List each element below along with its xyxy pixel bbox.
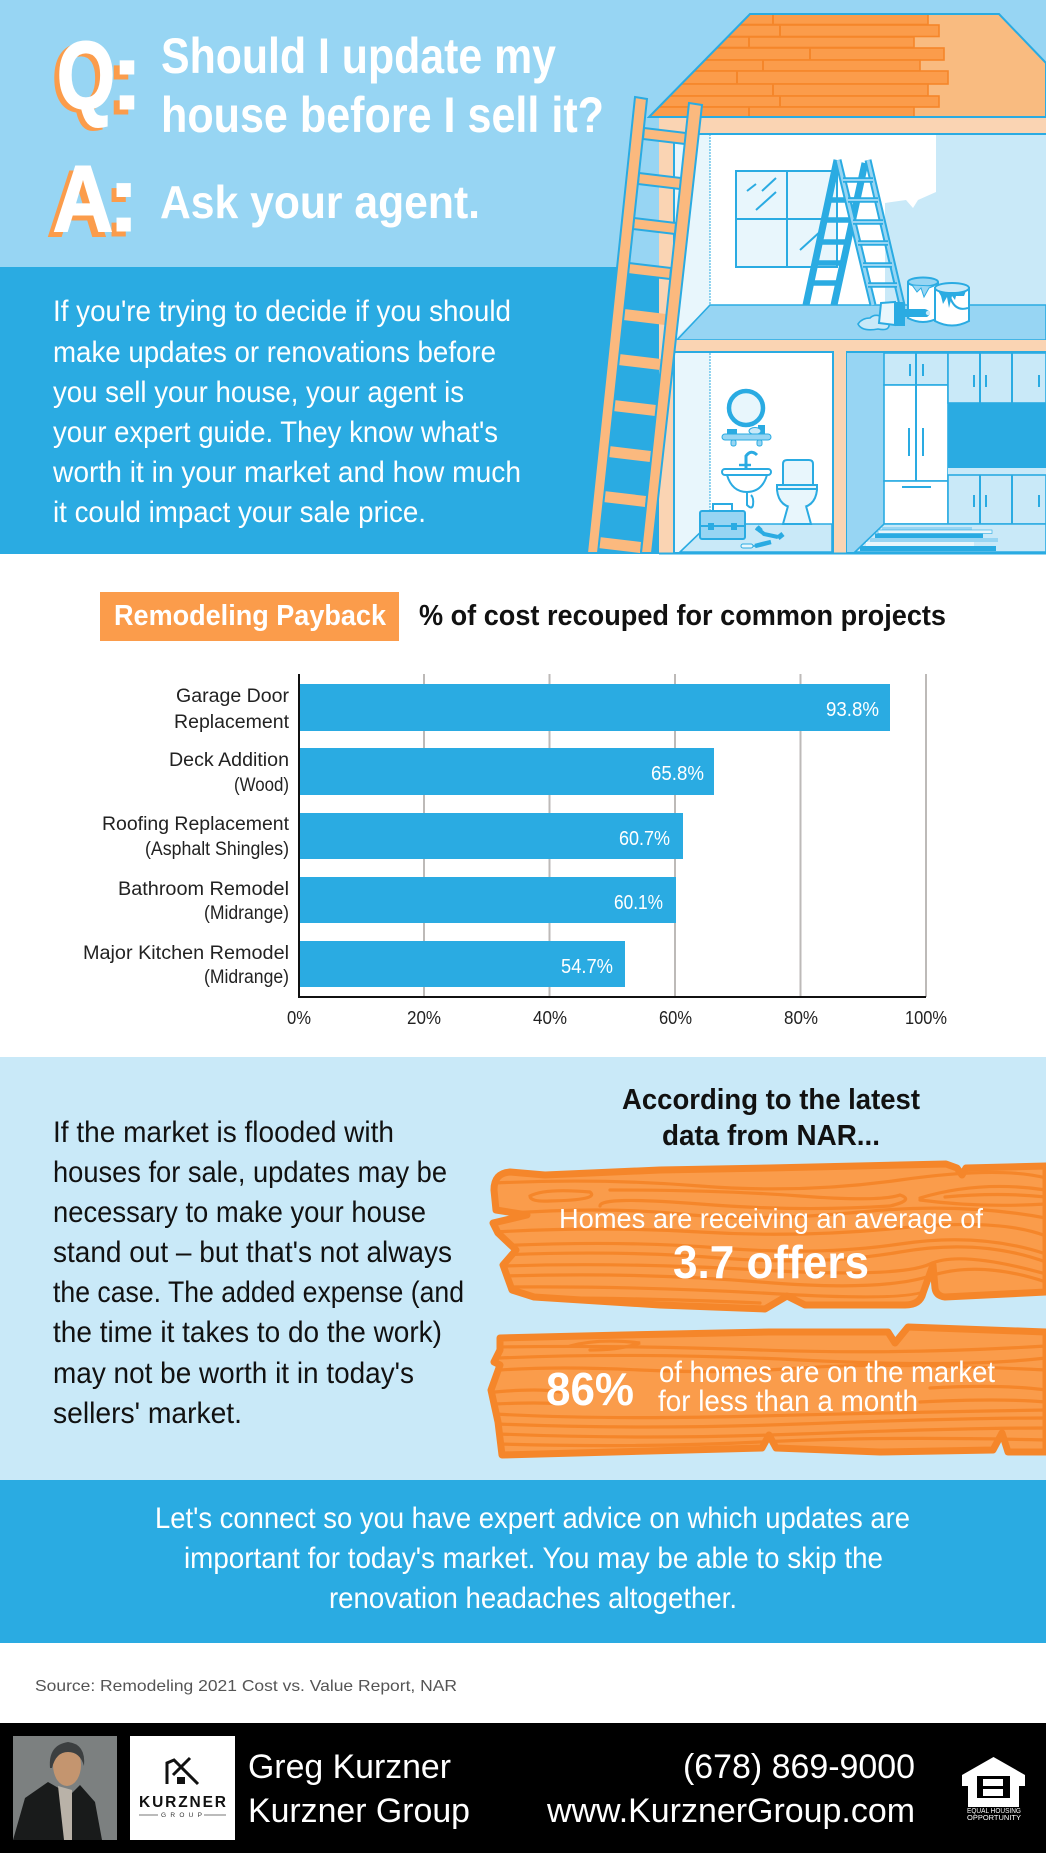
bar: roofing replacement: (Asphalt Shingles)	[145, 839, 289, 860]
text block: intro paragraph: worth it in your market and how much	[52, 456, 521, 489]
cabinets upper over fridge	[884, 353, 948, 385]
big letter Q: :	[111, 23, 143, 130]
text block: market paragraph: stand out – but that's not always	[53, 1236, 452, 1269]
panel: market data background	[0, 1057, 1046, 1480]
heading: NAR data	[622, 1084, 920, 1152]
backsplash	[948, 403, 1046, 468]
bar: deck addition: (Wood)	[234, 775, 289, 796]
peach outer wall	[659, 134, 674, 553]
panel: call to action	[0, 1480, 1046, 1643]
call to action text: important for today's market. You may be able to skip the	[184, 1542, 883, 1575]
call to action text: Let's connect so you have expert advice on which updates are	[155, 1502, 910, 1535]
agent name: Kurzner Group	[248, 1792, 470, 1830]
question text: Should I update my	[161, 28, 556, 84]
text block: market paragraph: sellers' market.	[53, 1397, 242, 1430]
big letter A: :	[103, 151, 134, 256]
source note: Source: Remodeling 2021 Cost vs. Value Report, NAR	[35, 1678, 457, 1695]
orange tag	[100, 592, 399, 641]
bar: major kitchen remodel: 54.7%	[561, 956, 613, 978]
title: answer	[47, 146, 480, 256]
bar: major kitchen remodel: (Midrange)	[204, 967, 289, 988]
text block: market paragraph: houses for sale, updates may be	[53, 1156, 447, 1189]
fridge	[884, 385, 948, 524]
bar: bathroom remodel	[118, 877, 676, 924]
bar: bathroom remodel: (Midrange)	[204, 903, 289, 924]
footer bar	[0, 1723, 1046, 1853]
grid lines and axes	[298, 674, 926, 998]
bar: deck addition	[169, 748, 714, 796]
axis labels: 60%	[659, 1008, 692, 1028]
logo: Kurzner Group	[130, 1736, 235, 1840]
big letter A: :	[108, 146, 139, 251]
heading: NAR data: data from NAR...	[662, 1120, 880, 1152]
base cabinets	[948, 468, 1046, 524]
icon: mirror	[729, 391, 763, 425]
base line	[659, 552, 1046, 554]
icon: equal housing opportunity: OPPORTUNITY	[967, 1815, 1021, 1822]
plank text	[658, 1356, 996, 1418]
roof	[640, 14, 1046, 118]
panel: sky header background	[0, 0, 1046, 267]
contact details: (678) 869-9000	[683, 1748, 915, 1786]
paint cans	[908, 278, 969, 326]
icon: wrench and screwdriver	[741, 527, 783, 548]
photo: agent portrait	[13, 1736, 117, 1840]
wood grain	[495, 1172, 1046, 1303]
text block: market paragraph: the case. The added expense (and	[53, 1276, 464, 1309]
icon: toolbox	[700, 504, 745, 539]
icon: shelf	[722, 425, 771, 446]
text block: market paragraph: the time it takes to do the work)	[53, 1316, 442, 1349]
text block: intro paragraph	[52, 295, 521, 529]
bar: garage door: Garage Door	[176, 686, 290, 707]
eave	[659, 118, 1046, 134]
contact details	[546, 1748, 915, 1830]
axis labels: 20%	[407, 1008, 441, 1028]
big number: 86%: 86%	[546, 1363, 634, 1415]
bar: bathroom remodel: Bathroom Remodel	[118, 879, 289, 900]
agent name: Greg Kurzner	[248, 1748, 451, 1786]
axis labels: 0%	[287, 1008, 311, 1028]
call to action text	[155, 1502, 910, 1615]
axis labels	[287, 1008, 947, 1028]
text block: market paragraph: necessary to make your house	[53, 1196, 426, 1229]
bar chart: remodeling payback	[83, 674, 947, 1028]
text block: intro paragraph: If you're trying to decide if you should	[53, 295, 511, 328]
big letter A: A	[47, 151, 107, 256]
question text: house before I sell it?	[161, 87, 604, 143]
window	[736, 171, 837, 267]
heading: remodeling payback	[100, 592, 946, 641]
illustration: orange extension ladder	[587, 97, 702, 553]
bar: deck addition: 65.8%	[651, 763, 704, 785]
icon: equal housing opportunity	[962, 1757, 1025, 1822]
orange tag: Remodeling Payback	[114, 600, 387, 632]
callout: wood plank days on market	[491, 1327, 1046, 1455]
bar: garage door: 93.8%	[826, 699, 879, 721]
callout: wood plank offers	[493, 1164, 1046, 1309]
text block: market paragraph	[53, 1116, 464, 1430]
logo: Kurzner Group: GROUP	[161, 1812, 202, 1819]
icon: equal housing opportunity: EQUAL HOUSING	[967, 1808, 1021, 1815]
big letter Q: :	[105, 28, 137, 135]
paint brush and puddle	[858, 302, 930, 330]
bar: roofing replacement	[102, 813, 683, 860]
bathroom	[674, 352, 833, 553]
big letter Q: Q	[52, 25, 110, 132]
logo: Kurzner Group: KURZNER	[139, 1794, 226, 1811]
bar: deck addition: Deck Addition	[169, 750, 289, 771]
axis labels: 80%	[784, 1008, 818, 1028]
icon: toilet	[777, 460, 817, 524]
contact details: www.KurznerGroup.com	[546, 1792, 915, 1830]
big number: offers: 3.7 offers	[673, 1236, 869, 1288]
text block: intro paragraph: make updates or renovations before	[53, 336, 496, 369]
floor upper	[677, 305, 1046, 340]
kitchen	[847, 352, 1046, 553]
text block: intro paragraph: your expert guide. They know what's	[53, 416, 498, 449]
bar: garage door: Replacement	[174, 712, 290, 733]
floor planks	[855, 524, 1046, 552]
upper room	[659, 134, 1046, 340]
agent name	[248, 1748, 470, 1830]
illustration: house cross-section	[640, 14, 1046, 554]
bar: garage door	[174, 684, 890, 733]
text block: intro paragraph: you sell your house, your agent is	[53, 376, 464, 409]
stepladder	[806, 160, 902, 305]
peach pillar	[834, 352, 847, 553]
axis labels: 40%	[533, 1008, 567, 1028]
chart subtitle: % of cost recouped for common projects	[419, 600, 946, 632]
icon: sink	[722, 452, 771, 508]
bar: roofing replacement: Roofing Replacement	[102, 814, 290, 835]
plank text: Homes are receiving an average of	[559, 1203, 983, 1234]
big letter A: A	[53, 146, 113, 251]
title: question	[52, 22, 604, 143]
panel: intro blue background	[0, 267, 1046, 554]
answer text: Ask your agent.	[160, 176, 480, 228]
question text	[161, 28, 604, 143]
bar: major kitchen remodel: Major Kitchen Remodel	[83, 943, 289, 964]
big letter Q: Q	[57, 22, 115, 129]
bar: roofing replacement: 60.7%	[619, 828, 670, 850]
plank text: for less than a month	[658, 1385, 918, 1418]
text block: market paragraph: may not be worth it in today's	[53, 1357, 414, 1390]
wall cabinets	[948, 353, 1046, 403]
wood grain	[495, 1341, 1046, 1446]
text block: market paragraph: If the market is flooded with	[53, 1116, 394, 1149]
axis labels: 100%	[905, 1008, 947, 1028]
text block: intro paragraph: it could impact your sale price.	[53, 496, 426, 529]
peach floor band	[674, 340, 1046, 352]
heading: NAR data: According to the latest	[622, 1084, 920, 1116]
bar: major kitchen remodel	[83, 941, 625, 988]
bar: bathroom remodel: 60.1%	[614, 892, 663, 914]
plank text: of homes are on the market	[659, 1356, 996, 1389]
call to action text: renovation headaches altogether.	[329, 1582, 737, 1615]
